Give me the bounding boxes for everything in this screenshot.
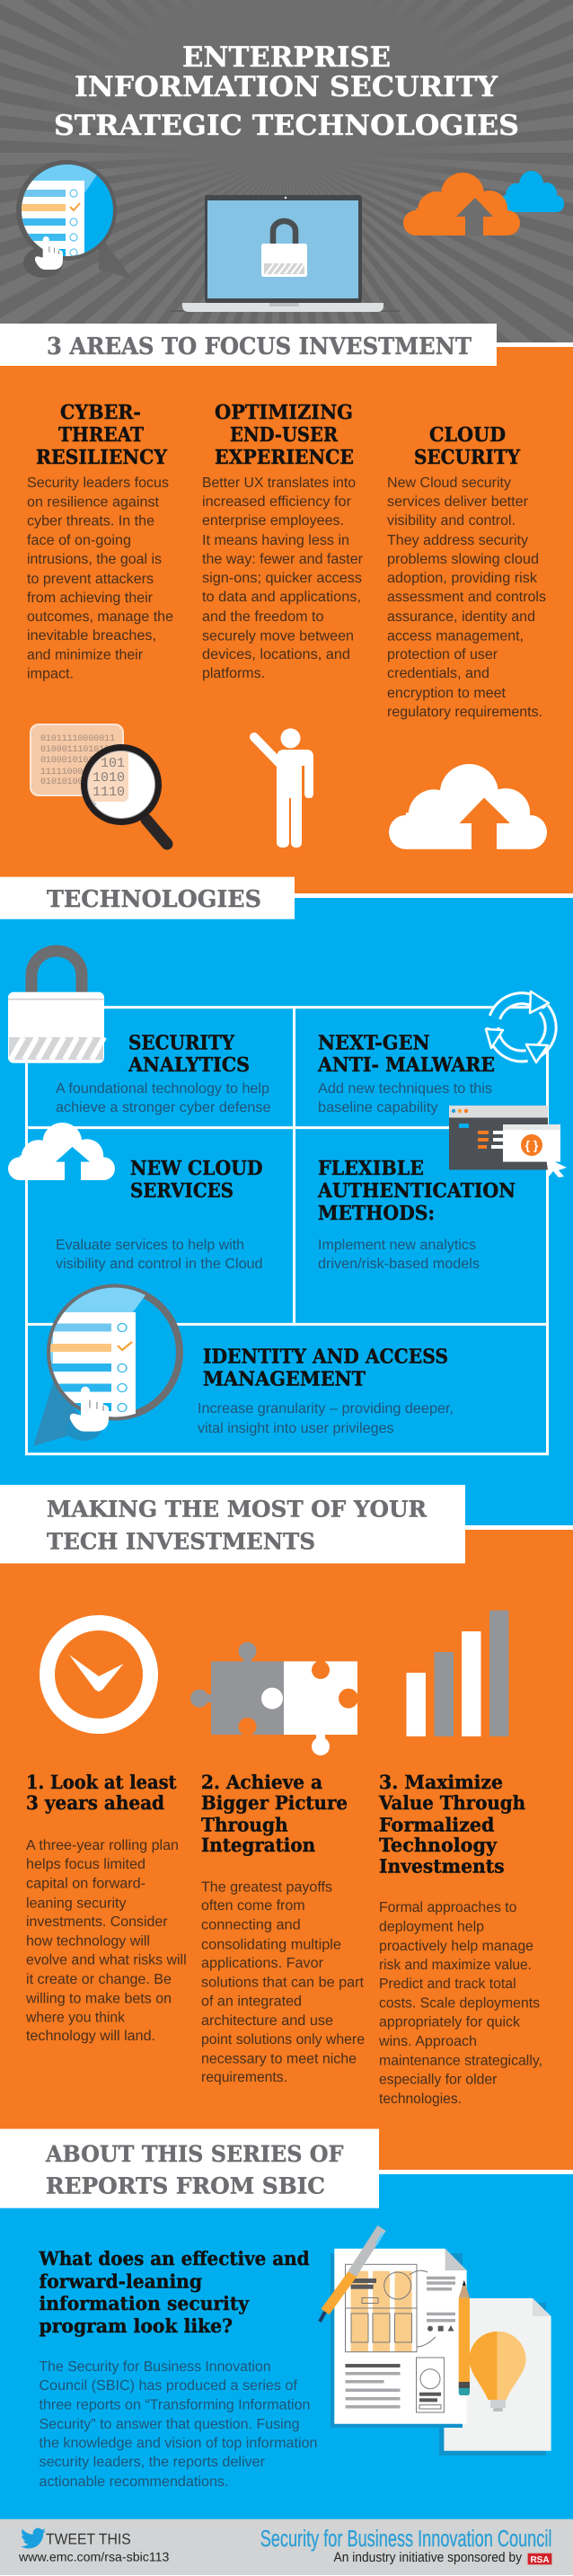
icon: code browser window xyxy=(449,1106,567,1177)
heading: what does an effective program look like: What does an effective and xyxy=(39,2247,310,2270)
text: look ahead body: A three-year rolling plan xyxy=(26,1838,179,1853)
text: cyber-threat body: to prevent attackers xyxy=(27,572,154,587)
heading: security analytics: SECURITY xyxy=(128,1032,234,1055)
text: cyber-threat body: intrusions, the goal is xyxy=(27,552,162,567)
section banner: technologies: TECHNOLOGIES xyxy=(47,886,261,913)
text: look ahead body: capital on forward- xyxy=(26,1877,145,1891)
blue section background: about xyxy=(0,2174,573,2519)
panel: look ahead xyxy=(25,1623,187,2044)
back document with light bulb xyxy=(439,2298,551,2456)
heading: new cloud services: NEW CLOUD xyxy=(130,1157,262,1180)
title: ENTERPRISE xyxy=(182,41,391,74)
text: identity body xyxy=(198,1401,454,1436)
icon: magnifier over binary: 1010 xyxy=(93,770,125,786)
icon: circular arrows xyxy=(486,991,551,1062)
heading: maximize value through formalized technology investments: Formalized xyxy=(379,1814,495,1835)
text: cyber-threat body: face of on-going xyxy=(27,533,131,548)
heading: optimizing end-user experience: OPTIMIZING xyxy=(215,401,353,424)
text: look ahead body: where you think xyxy=(25,2010,126,2025)
pen xyxy=(320,2228,383,2322)
heading: what does an effective program look like: program look like? xyxy=(40,2314,233,2337)
heading: look at least 3 years ahead: 3 years ahead xyxy=(26,1791,164,1814)
text: flexible authentication body: Implement new analytics xyxy=(318,1238,476,1253)
section banner: making the most: TECH INVESTMENTS xyxy=(47,1528,315,1554)
section banner: about this series: REPORTS FROM SBIC xyxy=(46,2173,325,2199)
text: about the SBIC reports: Security” to answer that question. Fusing xyxy=(40,2417,299,2432)
heading: new cloud services xyxy=(130,1157,262,1203)
pencil xyxy=(459,2280,470,2395)
orange section background: tech investments xyxy=(0,1530,573,2170)
text: cyber-threat body: inevitable breaches, xyxy=(27,628,156,644)
text: about the SBIC reports: The Security for Business Innovation xyxy=(40,2359,271,2375)
heading: next-gen anti-malware: NEXT-GEN xyxy=(318,1032,429,1055)
heading: optimizing end-user experience xyxy=(215,401,354,469)
text: cloud security body: adoption, providing risk xyxy=(387,571,538,586)
text: anti-malware body: baseline capability xyxy=(318,1100,438,1115)
heading: identity and access management: MANAGEMENT xyxy=(203,1368,366,1391)
icon: orange upload cloud xyxy=(403,173,520,235)
heading: identity and access management xyxy=(203,1346,448,1391)
heading: flexible authentication methods: FLEXIBLE xyxy=(318,1157,424,1180)
text: cloud security body: credentials, and xyxy=(387,666,489,681)
text: tweet this: TWEET THIS xyxy=(46,2531,131,2548)
text: look ahead body: it create or change. Be xyxy=(26,1972,172,1987)
text: about the SBIC reports: three reports on “Transforming Information xyxy=(40,2398,311,2413)
heading: maximize value through formalized technology investments: Technology xyxy=(379,1834,498,1856)
text: look ahead body: willing to make bets on xyxy=(25,1992,172,2006)
heading: new cloud services: SERVICES xyxy=(130,1179,234,1203)
text: end-user body: and the freedom to xyxy=(202,609,324,625)
text: cyber-threat body: Security leaders focus xyxy=(27,475,169,491)
header ray background xyxy=(0,0,573,347)
heading: cloud security xyxy=(414,423,520,469)
heading: cyber-threat resiliency: RESILIENCY xyxy=(36,446,167,469)
text: bigger picture body: connecting and xyxy=(201,1918,301,1932)
section banner: 3 areas xyxy=(0,324,573,366)
heading: maximize value through formalized technology investments: 3. Maximize xyxy=(379,1771,503,1793)
text: anti-malware body xyxy=(318,1081,492,1115)
heading: achieve a bigger picture xyxy=(201,1771,348,1856)
heading: look at least 3 years ahead xyxy=(26,1771,177,1814)
text: cyber-threat body: impact. xyxy=(27,667,74,682)
text: identity body: Increase granularity – providing deeper, xyxy=(198,1401,454,1417)
text: maximize value body: Formal approaches to xyxy=(379,1900,516,1915)
icon: magnifier over binary: 01010100101110 xyxy=(40,777,115,787)
heading: achieve a bigger picture: Integration xyxy=(201,1834,315,1856)
text: cloud security body: New Cloud security xyxy=(387,475,511,491)
title: INFORMATION SECURITY xyxy=(75,71,498,103)
heading: what does an effective program look like: forward-leaning xyxy=(40,2270,202,2293)
icon: twitter bird xyxy=(21,2528,46,2548)
heading: next-gen anti-malware: ANTI- MALWARE xyxy=(317,1053,495,1077)
text: flexible authentication body: driven/risk-based models xyxy=(318,1257,480,1272)
text: end-user body: increased efficiency for xyxy=(202,494,352,510)
text: cyber-threat body: from achieving their xyxy=(27,591,154,606)
icon: magnifier over binary: 1110 xyxy=(93,785,125,800)
text: maximize value body: wins. Approach xyxy=(378,2034,477,2049)
text: bigger picture body: requirements. xyxy=(201,2070,287,2085)
text: end-user body xyxy=(202,475,364,681)
text: end-user body: securely move between xyxy=(202,629,354,644)
heading: flexible authentication methods: AUTHENTICATION xyxy=(317,1179,516,1203)
text: cloud security body: regulatory requirements. xyxy=(387,705,542,720)
text: bigger picture body: solutions that can be part xyxy=(201,1976,365,1990)
text: security analytics body xyxy=(56,1081,271,1115)
text: about the SBIC reports: actionable recommendations. xyxy=(40,2474,229,2490)
icon: white upload cloud xyxy=(389,764,547,850)
section banner: making the most xyxy=(0,1485,573,1563)
panel: bigger picture xyxy=(190,1642,365,2085)
text: cyber-threat body: outcomes, manage the xyxy=(27,609,173,625)
heading: cloud security: SECURITY xyxy=(414,446,520,469)
heading: flexible authentication methods xyxy=(317,1157,516,1225)
text: cloud security body: services deliver better xyxy=(387,494,529,510)
text: look ahead body: technology will land. xyxy=(26,2029,155,2044)
text: sponsor line: An industry initiative sponsored by xyxy=(334,2550,522,2565)
icon: laptop with padlock xyxy=(171,195,400,312)
heading: security analytics: ANALYTICS xyxy=(128,1053,250,1077)
heading: achieve a bigger picture: Through xyxy=(201,1814,288,1835)
heading: achieve a bigger picture: Bigger Picture xyxy=(201,1791,348,1814)
text: maximize value body: Predict and track total xyxy=(379,1976,516,1992)
heading: identity and access management: IDENTITY AND ACCESS xyxy=(203,1346,448,1369)
text: about the SBIC reports: security leaders, the reports deliver xyxy=(40,2455,266,2470)
panel: flexible authentication xyxy=(317,1106,567,1272)
section banner: about this series: ABOUT THIS SERIES OF xyxy=(45,2141,344,2167)
heading: next-gen anti-malware xyxy=(317,1032,495,1077)
panel: optimizing end-user experience xyxy=(202,401,364,848)
text: new cloud body xyxy=(56,1238,262,1272)
text: look ahead body: investments. Consider xyxy=(26,1914,168,1930)
text: identity body: vital insight into user privileges xyxy=(198,1421,394,1436)
icon: clock xyxy=(47,1623,151,1726)
text: security analytics body: A foundational technology to help xyxy=(56,1081,269,1097)
panel: maximize value xyxy=(378,1611,542,2107)
heading: security analytics xyxy=(128,1032,250,1077)
text: cloud security body: visibility and control. xyxy=(387,513,516,529)
text: security analytics body: achieve a stronger cyber defense xyxy=(56,1100,271,1115)
section banner: technologies xyxy=(0,877,573,919)
text: cloud security body: They address security xyxy=(387,533,528,548)
panel: new cloud services xyxy=(8,1123,262,1272)
icon: upload cloud xyxy=(8,1123,115,1181)
section banner: making the most: MAKING THE MOST OF YOUR xyxy=(47,1496,427,1523)
section banner: about this series xyxy=(0,2128,573,2208)
text: new cloud body: Evaluate services to help with xyxy=(56,1238,244,1253)
title: STRATEGIC TECHNOLOGIES xyxy=(54,110,519,142)
text: anti-malware body: Add new techniques to this xyxy=(318,1081,492,1097)
text: end-user body: devices, locations, and xyxy=(202,647,350,662)
text: end-user body: the way: fewer and faster xyxy=(202,552,364,567)
text: new cloud body: visibility and control in the Cloud xyxy=(56,1257,262,1272)
heading: maximize value through formalized technology investments: Investments xyxy=(379,1855,505,1877)
logo: RSA xyxy=(528,2554,551,2565)
front wireframe document xyxy=(331,2249,467,2428)
text: maximize value body: costs. Scale deployments xyxy=(379,1995,540,2011)
icon: code browser window: { } xyxy=(525,1138,539,1152)
text: bigger picture body: of an integrated xyxy=(201,1994,302,2009)
text: end-user body: to data and applications, xyxy=(202,590,361,605)
heading: achieve a bigger picture: 2. Achieve a xyxy=(201,1771,322,1793)
text: end-user body: sign-ons; quicker access xyxy=(202,571,362,586)
technology grid lines xyxy=(27,1008,548,1454)
text: maximize value body: appropriately for quick xyxy=(379,2015,521,2030)
text: cyber-threat body: cyber threats. In the xyxy=(27,514,154,529)
text: cloud security body: encryption to meet xyxy=(387,686,507,701)
text: maximize value body: technologies. xyxy=(379,2092,462,2107)
text: cyber-threat body: and minimize their xyxy=(27,648,144,663)
icon: blue cloud xyxy=(498,171,564,212)
text: look ahead body: leaning security xyxy=(26,1896,126,1911)
heading: cloud security: CLOUD xyxy=(429,423,506,447)
text: cloud security body: access management, xyxy=(387,629,524,644)
text: tweet url: www.emc.com/rsa-sbic113 xyxy=(18,2549,170,2563)
icon: magnifier over binary: 11111000111010 xyxy=(40,768,115,777)
text: about the SBIC reports xyxy=(40,2359,318,2490)
text: end-user body: It means having less in xyxy=(202,533,349,548)
section banner: 3 areas: 3 AREAS TO FOCUS INVESTMENT xyxy=(47,333,472,360)
text: flexible authentication body xyxy=(318,1238,480,1272)
illustration: documents, pen, pencil and light bulb xyxy=(320,2228,551,2456)
text: cloud security body: assurance, identity and xyxy=(387,609,535,625)
orange section background: 3 areas xyxy=(0,347,573,893)
heading: look at least 3 years ahead: 1. Look at least xyxy=(26,1771,177,1793)
text: end-user body: Better UX translates into xyxy=(202,475,356,491)
text: bigger picture body: consolidating multiple xyxy=(201,1937,341,1952)
icon: magnifier over binary: 101 xyxy=(101,756,125,771)
blue section background: technologies xyxy=(0,898,573,1525)
icon: identity checklist circle xyxy=(16,160,132,279)
panel: identity and access management xyxy=(33,1285,454,1446)
heading: cyber-threat resiliency: CYBER- xyxy=(60,401,141,424)
heading: optimizing end-user experience: END-USER xyxy=(230,423,339,447)
text: look ahead body: helps focus limited xyxy=(26,1857,145,1872)
panel: security analytics xyxy=(8,951,271,1115)
text: bigger picture body xyxy=(201,1879,365,2085)
heading: optimizing end-user experience: EXPERIENCE xyxy=(215,446,354,469)
icon: person with raised arm xyxy=(254,728,313,848)
heading: what does an effective program look like: information security xyxy=(40,2292,250,2314)
logo: RSA: RSA xyxy=(530,2555,550,2565)
text: look ahead body xyxy=(25,1838,187,2044)
text: bigger picture body: The greatest payoffs xyxy=(201,1879,332,1895)
panel: cloud security xyxy=(387,423,547,850)
text: cyber-threat body: on resilience against xyxy=(27,495,160,511)
text: cloud security body xyxy=(387,475,546,720)
text: bigger picture body: point solutions only where xyxy=(201,2032,365,2047)
text: cloud security body: assessment and controls xyxy=(387,590,546,605)
text: look ahead body: how technology will xyxy=(26,1934,150,1949)
text: cloud security body: protection of user xyxy=(387,647,498,662)
text: maximize value body xyxy=(378,1900,542,2107)
text: about the SBIC reports: Council (SBIC) has produced a series of xyxy=(40,2378,297,2394)
text: cyber-threat body xyxy=(27,475,173,682)
icon: padlock xyxy=(8,951,104,1063)
icon: checklist magnifier xyxy=(33,1285,180,1446)
text: end-user body: platforms. xyxy=(202,666,265,681)
text: bigger picture body: often come from xyxy=(201,1898,305,1914)
text: cloud security body: problems slowing cloud xyxy=(387,552,539,567)
heading: flexible authentication methods: METHODS: xyxy=(318,1202,435,1225)
heading: maximize value through formalized technology investments: Value Through xyxy=(378,1791,525,1814)
icon: puzzle pieces xyxy=(190,1642,358,1755)
icon: magnifier over binary xyxy=(31,724,167,844)
heading: maximize value through formalized technology investments xyxy=(378,1771,525,1877)
heading: cyber-threat resiliency xyxy=(36,401,167,469)
text: look ahead body: evolve and what risks will xyxy=(26,1952,187,1968)
text: end-user body: enterprise employees. xyxy=(202,513,344,529)
text: bigger picture body: architecture and use xyxy=(201,2013,333,2029)
icon: magnifier over binary: 01011110000011 xyxy=(40,734,115,744)
panel: next-gen anti-malware xyxy=(317,991,551,1115)
heading: cyber-threat resiliency: THREAT xyxy=(58,423,145,447)
text: maximize value body: especially for older xyxy=(379,2073,498,2088)
icon: bar chart xyxy=(406,1611,508,1737)
text: about the SBIC reports: the knowledge and vision of top information xyxy=(40,2436,318,2451)
text: maximize value body: maintenance strategically, xyxy=(379,2053,542,2068)
icon: magnifier over binary: 01000111010101 xyxy=(40,745,115,755)
text: maximize value body: deployment help xyxy=(379,1920,484,1934)
text: bigger picture body: necessary to meet niche xyxy=(201,2051,357,2066)
icon: magnifier over binary: 01000101010101 xyxy=(40,756,115,766)
text: maximize value body: proactively help manage xyxy=(379,1939,533,1954)
heading: what does an effective program look like xyxy=(39,2247,310,2337)
title xyxy=(54,41,519,142)
panel: cyber-threat resiliency xyxy=(27,401,173,844)
footer xyxy=(0,2519,573,2575)
text: bigger picture body: applications. Favor xyxy=(201,1956,324,1971)
text: maximize value body: risk and maximize value. xyxy=(379,1958,532,1973)
